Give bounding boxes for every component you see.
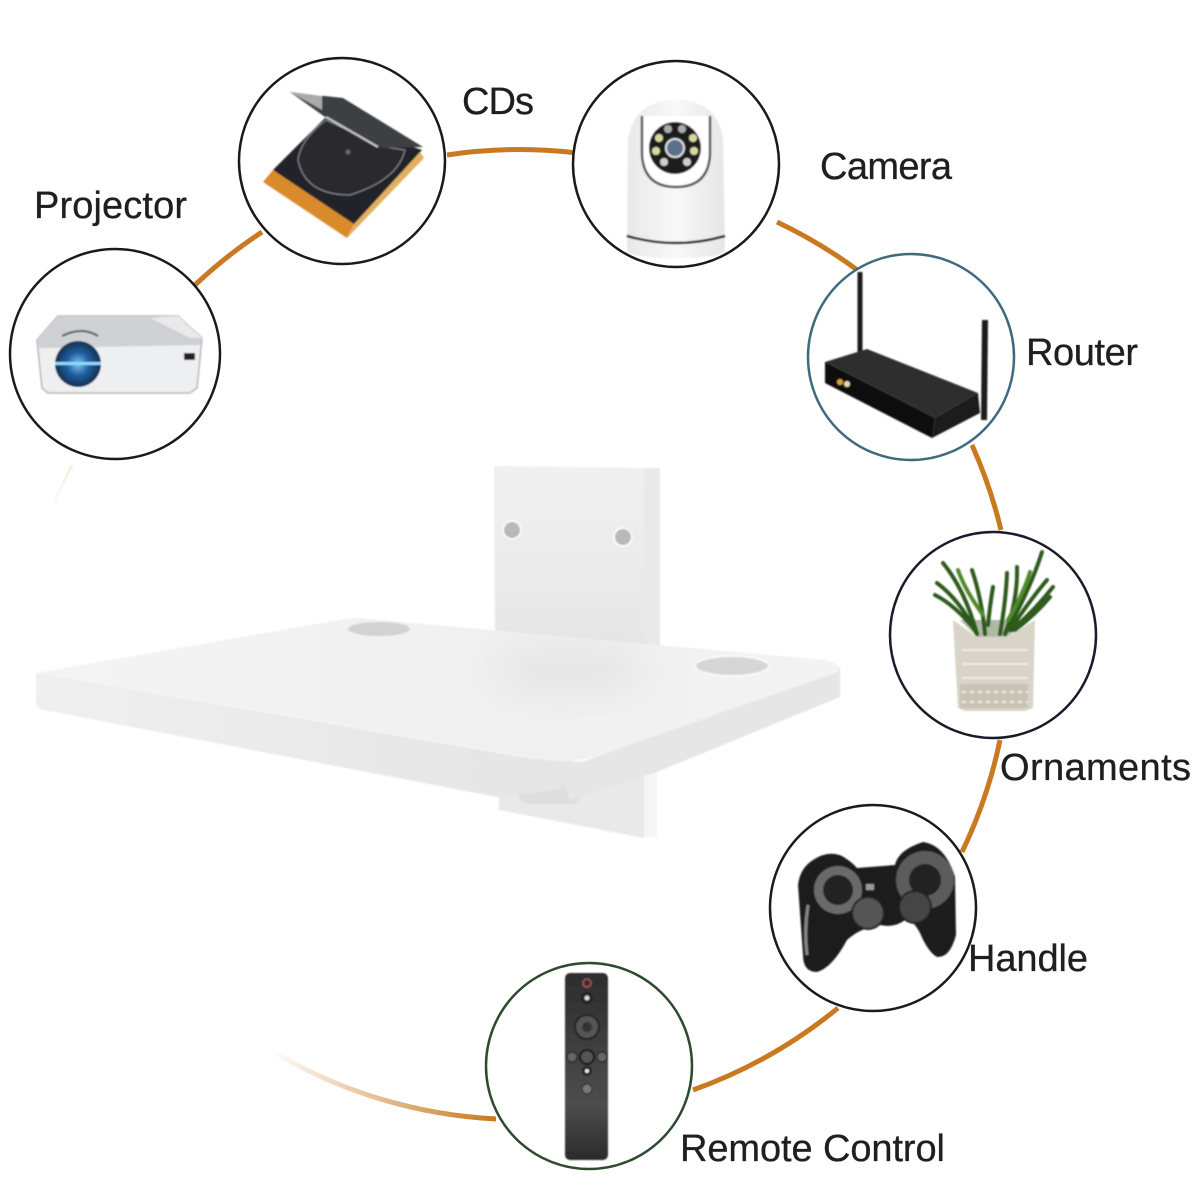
shelf — [36, 466, 840, 838]
circle: handle — [770, 805, 976, 1011]
circle: projector — [10, 249, 220, 459]
label: Projector: Projector — [34, 185, 187, 227]
label: Handle: Handle — [968, 938, 1088, 980]
shelf back plate — [494, 466, 660, 650]
shelf lower bracket — [499, 770, 657, 838]
orange arc ring — [52, 150, 1001, 1119]
label: CDs: CDs — [462, 81, 534, 123]
circle: ornaments — [890, 532, 1096, 738]
shelf board top — [36, 618, 839, 761]
circle: CDs — [239, 58, 445, 264]
shelf board front edges — [36, 667, 840, 800]
circle: camera — [573, 61, 779, 267]
label: Camera: Camera — [820, 146, 953, 188]
label: Router: Router — [1026, 332, 1138, 374]
label: Remote Control: Remote Control — [680, 1128, 945, 1170]
circle: router — [808, 254, 1014, 460]
label: Ornaments: Ornaments — [1000, 747, 1191, 789]
circle: remote control — [486, 963, 692, 1169]
